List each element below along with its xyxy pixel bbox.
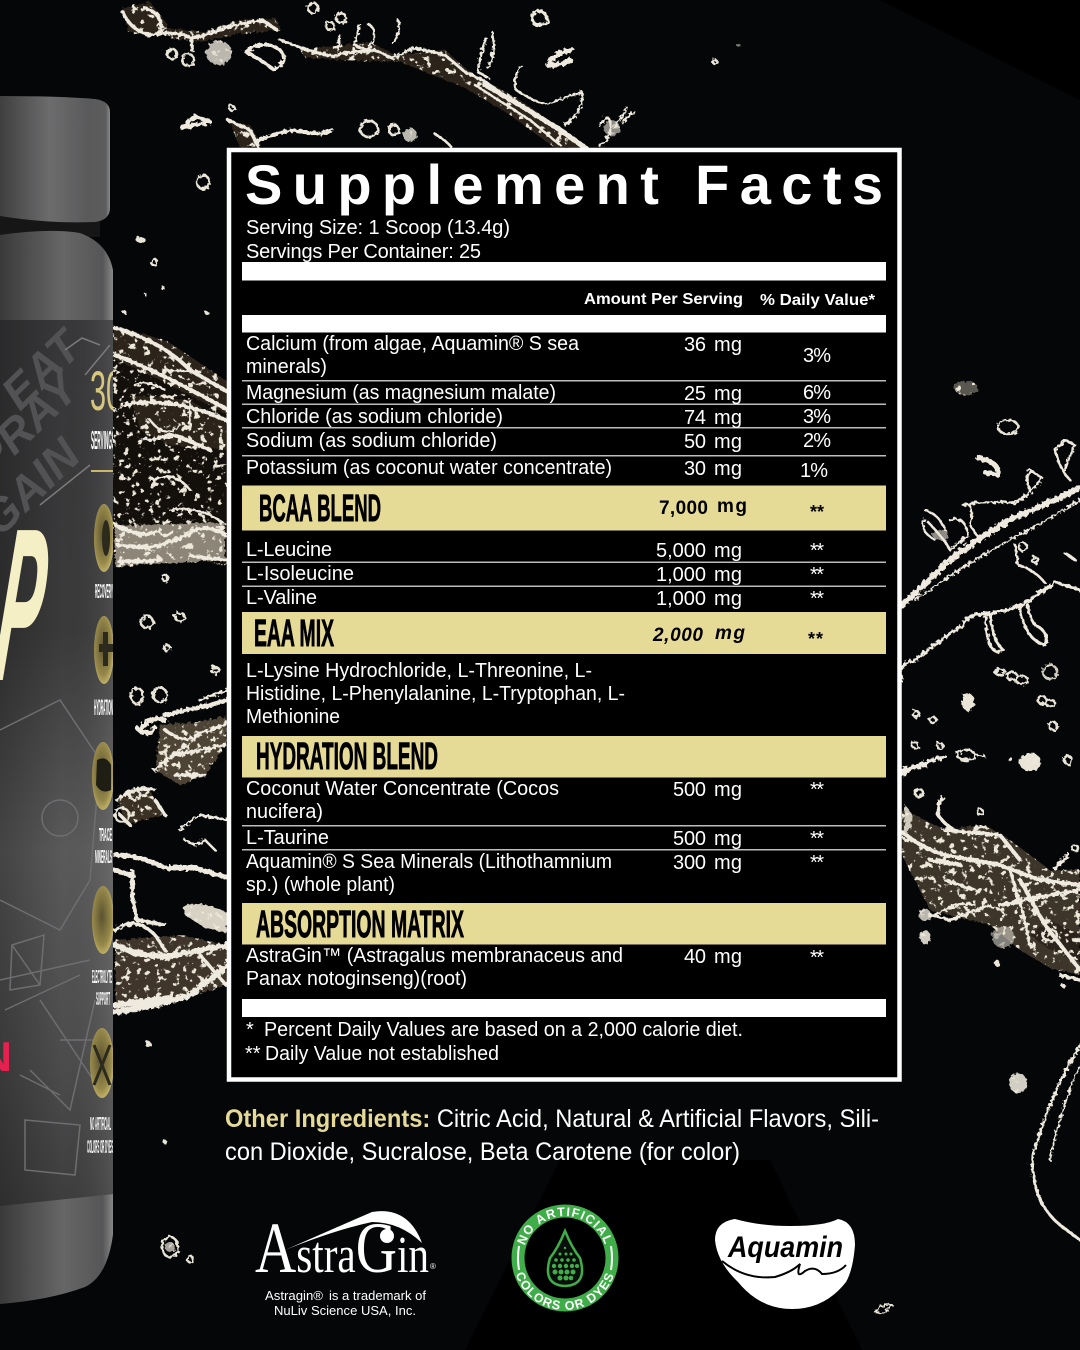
hydration ingredient rows: 300 (673, 852, 706, 874)
text: RECOVERY (95, 581, 113, 603)
footnotes: * (246, 1019, 254, 1041)
band: EAA mix: 2,000 (652, 625, 703, 646)
column headers: % Daily Value* (760, 292, 876, 309)
footnotes: ** (245, 1043, 261, 1065)
mineral rows: mg (714, 431, 742, 453)
band: BCAA blend: ** (810, 502, 824, 522)
EAA ingredient list: Methionine (246, 706, 340, 728)
mineral rows: Chloride (as sodium chloride) (246, 406, 503, 428)
bottle body (0, 231, 114, 1304)
serving information (246, 217, 510, 263)
BCAA ingredient rows: ** (810, 540, 824, 562)
mineral rows: 50 (684, 431, 706, 453)
footnotes: Percent Daily Values are based on a 2,000 calorie diet. (264, 1019, 743, 1041)
mineral rows: 1% (800, 460, 828, 482)
water splash: lower right wave (875, 1045, 1080, 1313)
water splash: left lower (115, 700, 228, 1262)
mineral rows (246, 333, 831, 482)
serving information: Servings Per Container: 25 (246, 241, 481, 263)
EAA ingredient list: L-Lysine Hydrochloride, L-Threonine, L- (246, 660, 592, 682)
BCAA ingredient rows: 5,000 (656, 540, 706, 562)
bottle label (0, 318, 114, 1206)
band: hydration blend (242, 736, 886, 778)
servings count (91, 371, 113, 472)
logo: Aquamin (715, 1219, 855, 1309)
mineral rows: Potassium (as coconut water concentrate) (246, 457, 612, 479)
trademark caption: Astragin® (265, 1288, 323, 1303)
other ingredients (225, 1105, 879, 1166)
hydration ingredient rows: ** (810, 779, 824, 801)
band: absorption matrix (242, 903, 886, 946)
serving information: Serving Size: 1 Scoop (13.4g) (246, 217, 510, 239)
band: BCAA blend: 7,000 (659, 498, 708, 519)
absorption ingredient row: AstraGin™ (Astragalus membranaceus and (246, 945, 623, 967)
hydration ingredient rows: sp.) (whole plant) (246, 874, 395, 896)
mineral rows: mg (714, 407, 742, 429)
text: COLORS OR DYES (87, 1137, 113, 1157)
mineral rows: mg (714, 334, 742, 356)
footnotes (245, 1019, 743, 1065)
water splash: left upper (113, 175, 228, 704)
band: BCAA blend: mg (717, 496, 747, 517)
BCAA ingredient rows: L-Leucine (246, 539, 332, 561)
logo: AstraGin: ® (430, 1262, 436, 1271)
text: NO ARTIFICIAL (90, 1114, 111, 1134)
hydration ingredient rows: 500 (673, 779, 706, 801)
trademark caption (265, 1288, 426, 1318)
badge: no artificial colors or dyes: COLORS OR DYES (516, 1272, 613, 1310)
hydration ingredient rows: mg (714, 852, 742, 874)
hydration ingredient rows: mg (714, 779, 742, 801)
other ingredients: con Dioxide, Sucralose, Beta Carotene (for color) (225, 1138, 740, 1166)
mineral rows: 30 (684, 458, 706, 480)
text: SERVINGS (91, 425, 115, 455)
absorption ingredient row: ** (810, 947, 824, 969)
band: BCAA blend: BCAA BLEND (259, 488, 381, 530)
text: SUPPORT (96, 989, 110, 1009)
hydration ingredient rows: L-Taurine (246, 827, 329, 849)
mineral rows: 3% (803, 406, 831, 428)
hydration ingredient rows: mg (714, 828, 742, 850)
band: hydration blend: HYDRATION BLEND (256, 736, 438, 778)
mineral rows: 6% (803, 382, 831, 404)
BCAA ingredient rows: 1,000 (656, 588, 706, 610)
mineral rows: Calcium (from algae, Aquamin® S sea (246, 333, 580, 355)
hydration ingredient rows: Aquamin® S Sea Minerals (Lithothamnium (246, 851, 612, 873)
icon: droplet (548, 1231, 582, 1286)
mineral rows: 25 (684, 383, 706, 405)
hydration ingredient rows: nucifera) (246, 801, 323, 823)
mineral rows: 74 (684, 407, 706, 429)
absorption ingredient row (246, 945, 824, 990)
hydration ingredient rows: 500 (673, 828, 706, 850)
footnotes: Daily Value not established (265, 1043, 499, 1065)
benefit icon: no artificial colors (87, 1028, 114, 1157)
band: EAA mix: ** (808, 629, 823, 649)
text: TRACE (99, 825, 112, 845)
BCAA ingredient rows: mg (714, 588, 742, 610)
EAA ingredient list: Histidine, L-Phenylalanine, L-Tryptophan, L- (246, 683, 625, 705)
benefit icon: recovery (94, 504, 114, 603)
text: MINERALS (95, 847, 112, 867)
BCAA ingredient rows: L-Valine (246, 587, 317, 609)
absorption ingredient row: 40 (684, 946, 706, 968)
hydration ingredient rows: Coconut Water Concentrate (Cocos (246, 778, 559, 800)
mineral rows: mg (714, 383, 742, 405)
benefit icon: electrolyte support (92, 886, 114, 1009)
BCAA ingredient rows: mg (714, 564, 742, 586)
water splash: right (900, 381, 1080, 987)
logo: Aquamin: Aquamin (727, 1231, 843, 1264)
BCAA ingredient rows: mg (714, 540, 742, 562)
BCAA ingredient rows: L-Isoleucine (246, 563, 354, 585)
band: EAA mix (242, 612, 886, 655)
mineral rows: mg (714, 458, 742, 480)
panel: supplement facts (229, 150, 900, 1080)
logo: AstraGin: AstraGin (255, 1208, 429, 1288)
heading: supplement facts: Supplement Facts (245, 153, 883, 216)
mineral rows: Sodium (as sodium chloride) (246, 430, 497, 452)
hydration ingredient rows (246, 778, 824, 896)
bottle neck shadow (0, 215, 100, 237)
mineral rows: 36 (684, 334, 706, 356)
BCAA ingredient rows: 1,000 (656, 564, 706, 586)
trademark caption: is a trademark of (329, 1288, 426, 1303)
mineral rows: minerals) (246, 356, 327, 378)
trademark caption: NuLiv Science USA, Inc. (274, 1303, 416, 1318)
absorption ingredient row: Panax notoginseng)(root) (246, 968, 467, 990)
other ingredients: Other Ingredients: Citric Acid, Natural & Artificial Flavors, Sili- (225, 1105, 879, 1133)
column headers (584, 291, 876, 309)
badge: no artificial colors or dyes: NO ARTIFICIAL (517, 1207, 611, 1245)
mineral rows: 2% (803, 430, 831, 452)
product bottle (0, 96, 122, 1304)
benefit icon: hydration (94, 616, 114, 720)
mineral rows: 3% (803, 345, 831, 367)
bottle cap (0, 96, 110, 222)
column headers: Amount Per Serving (584, 291, 743, 308)
band: EAA mix: EAA MIX (254, 613, 334, 655)
band: EAA mix: mg (715, 623, 745, 644)
BCAA ingredient rows (246, 539, 824, 610)
servings count: 30 (90, 359, 122, 422)
hydration ingredient rows: ** (810, 828, 824, 850)
benefit icon: trace minerals (92, 742, 114, 867)
hydration ingredient rows: ** (810, 852, 824, 874)
BCAA ingredient rows: ** (810, 564, 824, 586)
separator bars and rules (242, 262, 886, 1017)
badge: no artificial colors or dyes (512, 1204, 618, 1312)
text: HYDRATION (94, 695, 113, 720)
water splash: top (123, 2, 740, 150)
mineral rows: Magnesium (as magnesium malate) (246, 382, 556, 404)
band: absorption matrix: ABSORPTION MATRIX (256, 904, 464, 946)
text: ELECTROLYTE (92, 967, 112, 987)
EAA ingredient list (246, 660, 625, 728)
absorption ingredient row: mg (714, 946, 742, 968)
BCAA ingredient rows: ** (810, 588, 824, 610)
band: BCAA blend (242, 486, 886, 530)
